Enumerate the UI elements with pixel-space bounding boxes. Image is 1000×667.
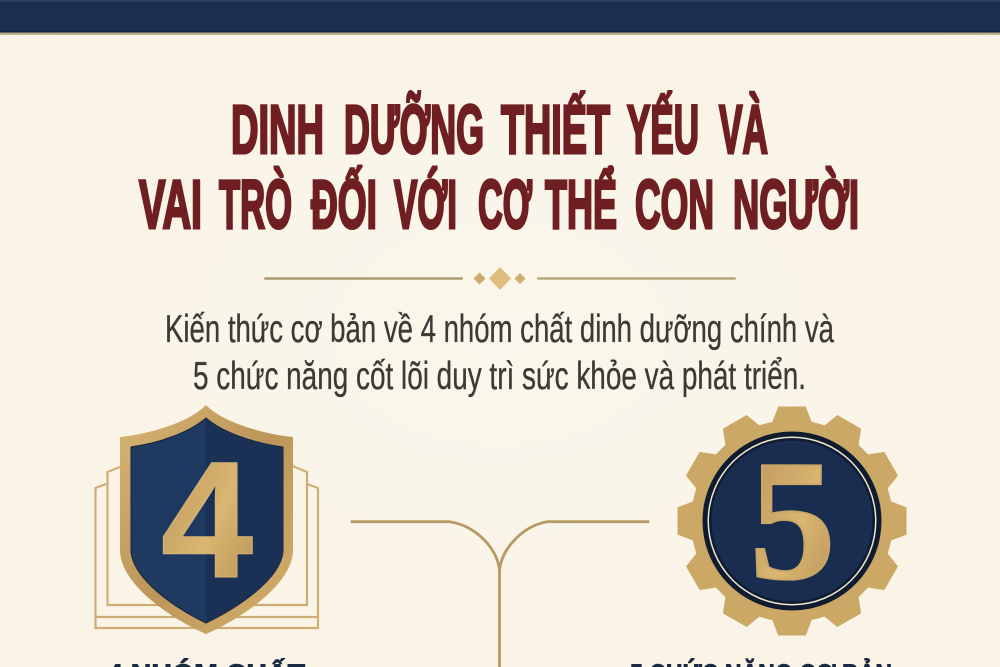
title: THỂ <box>545 166 617 243</box>
title: THIẾT <box>501 91 610 168</box>
number 5: 5 <box>750 426 836 616</box>
title: DƯỠNG <box>344 91 484 168</box>
top navy banner <box>0 0 1000 35</box>
title: TRÒ <box>219 166 292 243</box>
title: ĐỐI <box>311 166 377 243</box>
connector: branching gold line <box>352 522 648 667</box>
shield navy face <box>131 418 283 623</box>
title: NGƯỜI <box>733 166 859 243</box>
title: DINH <box>231 91 324 168</box>
icon: open book outline <box>96 465 318 628</box>
subtitle <box>165 308 834 398</box>
title: VỚI <box>394 166 457 243</box>
title <box>139 91 859 243</box>
shield frame <box>120 405 293 634</box>
number 4: 4 <box>161 428 253 613</box>
title: VÀ <box>719 91 768 168</box>
icon: gear with number 5 <box>678 408 906 634</box>
title: YẾU <box>627 91 699 168</box>
shield dark half <box>206 418 283 623</box>
gear teeth <box>678 408 906 634</box>
ornamental divider <box>264 267 736 290</box>
title: CƠ <box>478 166 532 243</box>
title: CON <box>635 166 714 243</box>
icon: shield with open book and number 4 <box>96 405 318 634</box>
title: VAI <box>139 166 202 243</box>
gear dial <box>702 432 882 610</box>
